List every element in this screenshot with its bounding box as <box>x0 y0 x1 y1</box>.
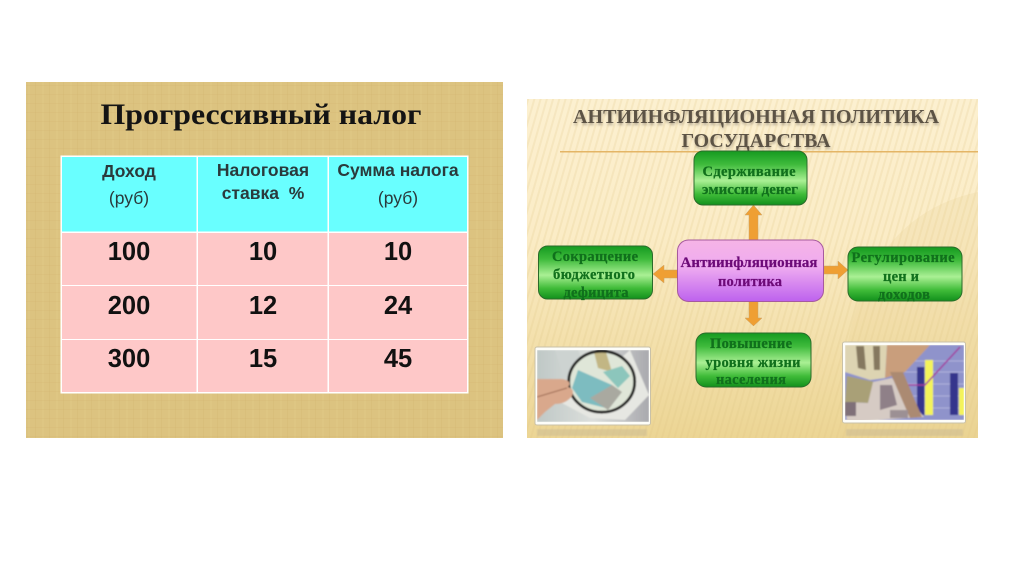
box: regulating prices and incomes: Регулирование <box>852 250 955 266</box>
box: raising living standards: Повышение <box>710 336 793 352</box>
table values: 200 <box>108 292 150 320</box>
table values <box>108 238 413 373</box>
heading: anti-inflation policy: ГОСУДАРСТВА <box>682 130 831 152</box>
reflection <box>846 429 963 436</box>
box: budget deficit reduction: дефицита <box>564 285 629 301</box>
photo: money and chart <box>842 342 966 436</box>
heading: anti-inflation policy <box>573 106 939 152</box>
heading: progressive tax: Прогрессивный налог <box>100 99 422 131</box>
table values: 10 <box>249 238 277 266</box>
box: anti-inflation policy center <box>678 240 824 302</box>
box: budget deficit reduction: Сокращение <box>552 249 639 265</box>
table: tax rates <box>60 156 468 394</box>
arrow: up <box>745 205 762 240</box>
panel: progressive tax <box>26 82 503 438</box>
box: budget deficit reduction <box>538 246 652 301</box>
table header text: ставка % <box>222 183 305 203</box>
box: anti-inflation policy center: Антиинфляционная <box>680 255 818 271</box>
table values: 15 <box>249 345 277 373</box>
table header text: Сумма налога <box>337 160 459 180</box>
box: restrain money emission: Сдерживание <box>702 164 796 180</box>
photo: magnifier over banknote <box>535 347 650 436</box>
table values: 100 <box>108 238 150 266</box>
box: regulating prices and incomes: цен и <box>883 269 919 285</box>
table header text <box>102 160 459 208</box>
box: restrain money emission: эмиссии денег <box>702 182 798 198</box>
table header text: Доход <box>102 161 156 181</box>
table values: 10 <box>384 238 412 266</box>
box: raising living standards <box>696 333 811 388</box>
box: restrain money emission <box>694 151 807 205</box>
table header text: (руб) <box>109 188 149 208</box>
arrow: right <box>824 261 848 279</box>
table values: 45 <box>384 345 412 373</box>
box: regulating prices and incomes: доходов <box>878 287 930 303</box>
box: raising living standards: населения <box>716 372 786 388</box>
table values: 12 <box>249 292 277 320</box>
box: budget deficit reduction: бюджетного <box>553 267 635 283</box>
reflection <box>537 429 647 436</box>
heading: anti-inflation policy: АНТИИНФЛЯЦИОННАЯ ПОЛИТИКА <box>573 106 939 128</box>
arrow: down <box>745 301 762 326</box>
box: anti-inflation policy center: политика <box>718 274 783 290</box>
panel: anti-inflation policy <box>527 99 978 438</box>
table header text: (руб) <box>378 188 418 208</box>
box: regulating prices and incomes <box>848 247 962 303</box>
arrow: left <box>653 265 678 283</box>
table header text: Налоговая <box>217 160 309 180</box>
table values: 300 <box>108 345 150 373</box>
table values: 24 <box>384 292 413 320</box>
box: raising living standards: уровня жизни <box>706 355 800 371</box>
